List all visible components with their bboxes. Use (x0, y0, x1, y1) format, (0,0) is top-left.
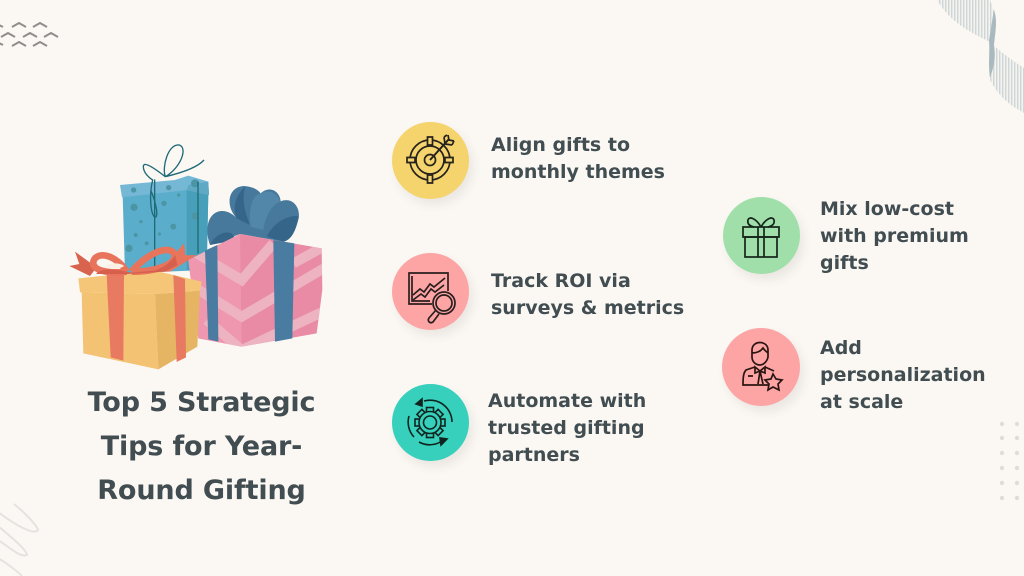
red ribbon bow (69, 243, 197, 276)
icon: gift on green circle (723, 197, 800, 274)
blue gift box (120, 145, 209, 273)
text: mix low-cost: Mix low-cost (820, 198, 954, 220)
yellow gift box (78, 271, 202, 369)
icon: automation gear on teal circle (392, 384, 469, 461)
icon: person with star on coral circle (722, 328, 800, 406)
text: automate: partners (488, 444, 580, 466)
text: mix low-cost (820, 198, 969, 274)
navy ribbon bow (207, 186, 299, 245)
decoration: top-right striped ribbon (937, 0, 1024, 113)
text: mix low-cost: with premium (820, 225, 969, 247)
text: track ROI: Track ROI via (491, 270, 631, 292)
decoration: right dot grid (1000, 422, 1019, 500)
decoration: top-left chevron pattern (0, 22, 58, 47)
text: add personalization: Add (820, 337, 862, 359)
text: add personalization: personalization (820, 364, 986, 386)
text: add personalization: at scale (820, 391, 903, 413)
text: add personalization (820, 337, 986, 413)
title: Round Gifting (97, 475, 306, 506)
text: track ROI (491, 270, 684, 319)
text: align gifts: Align gifts to (491, 134, 630, 156)
title (88, 387, 315, 506)
icon: chart with magnifier on pink circle (392, 253, 469, 330)
text: mix low-cost: gifts (820, 252, 869, 274)
text: automate (488, 390, 646, 466)
title: Top 5 Strategic (88, 387, 315, 418)
text: automate: trusted gifting (488, 417, 645, 439)
illustration: stack of gift boxes (70, 144, 322, 370)
text: track ROI: surveys & metrics (491, 297, 684, 319)
text: align gifts (491, 134, 665, 183)
icon: target on yellow circle (392, 122, 469, 199)
text: automate: Automate with (488, 390, 646, 412)
text: align gifts: monthly themes (491, 161, 665, 183)
decoration: bottom-left scribble (0, 504, 39, 576)
pink gift box (188, 234, 322, 347)
title: Tips for Year- (101, 431, 302, 462)
